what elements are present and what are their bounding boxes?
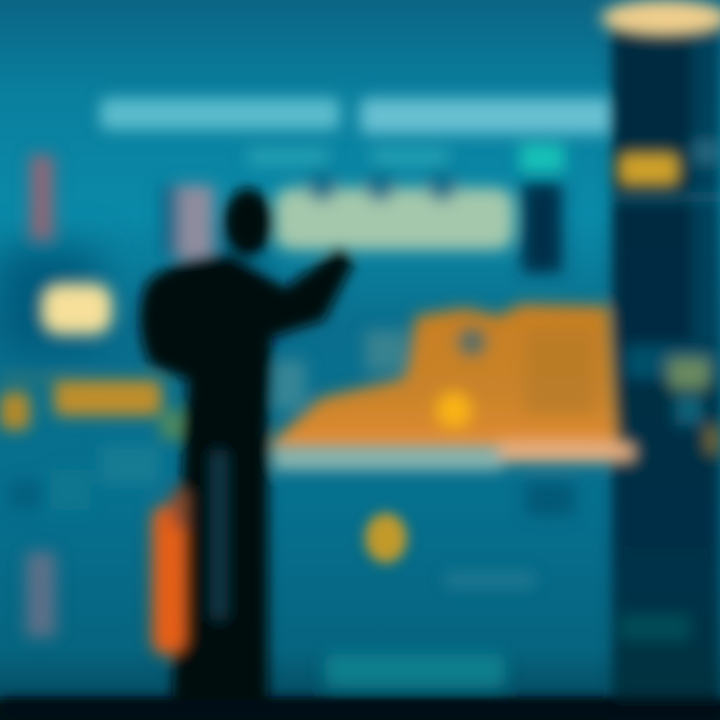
- left dark panel: [0, 240, 260, 350]
- chart highlights: [160, 328, 595, 440]
- upper background buildings: [30, 155, 562, 273]
- big number: [274, 171, 514, 250]
- orange chart: [270, 304, 620, 452]
- bottom band: [0, 698, 720, 720]
- right tower: [612, 25, 720, 720]
- orange reflection on legs: [152, 488, 190, 655]
- gap between legs: [210, 450, 228, 620]
- title: [100, 98, 614, 134]
- person silhouette: [140, 188, 354, 705]
- gold circle icon: [365, 513, 407, 563]
- left callout: [42, 284, 112, 334]
- tower cap: [601, 0, 720, 36]
- teal accent: [520, 144, 564, 172]
- tower window: [618, 140, 720, 640]
- lower text rows: [325, 482, 575, 688]
- subtitle: [248, 148, 448, 166]
- left reflections: [8, 445, 160, 637]
- left orange bar: [0, 376, 162, 430]
- light baseline: [272, 442, 636, 470]
